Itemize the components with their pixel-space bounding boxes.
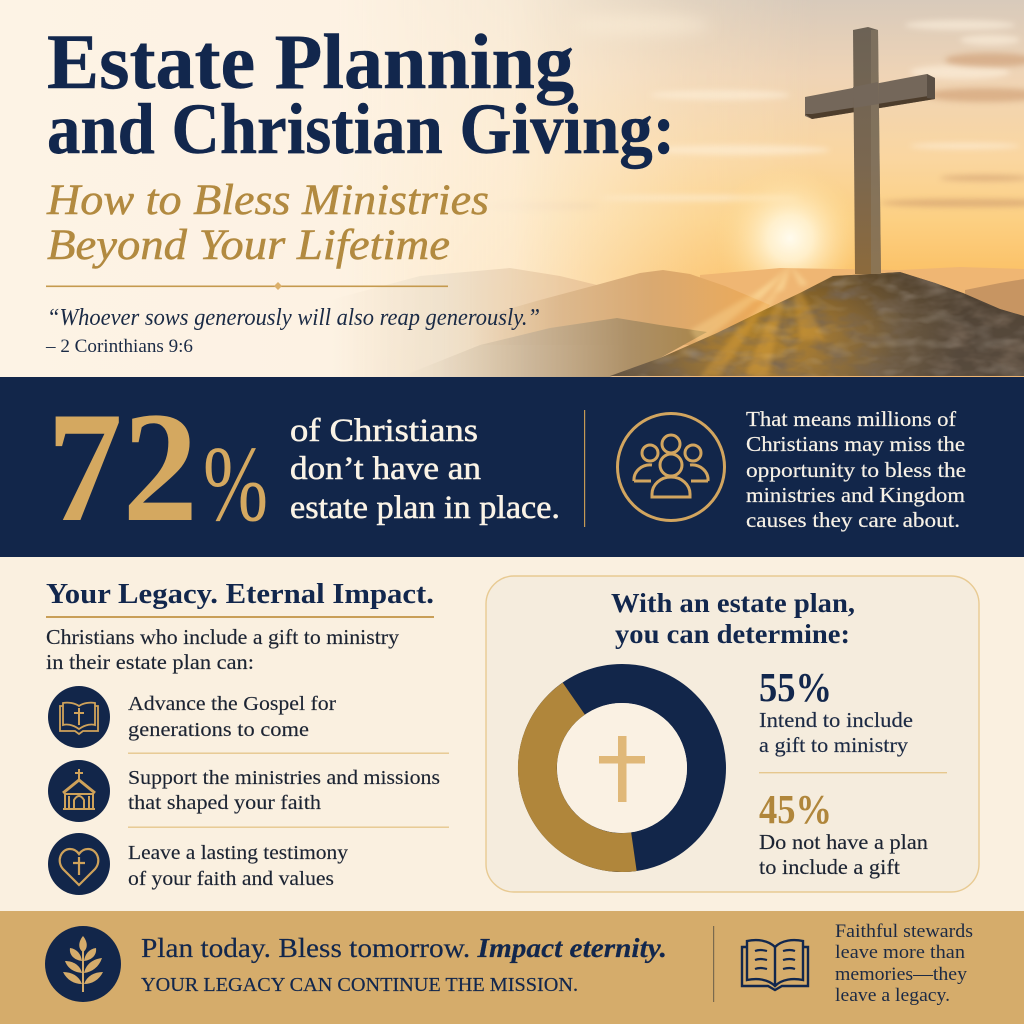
card heading [611, 588, 855, 649]
statistic 55%: 55% [759, 664, 832, 710]
hero photo: sunset sky, mountains, hill and cross [0, 0, 1024, 377]
legacy intro text: Christians who include a gift to ministry [46, 625, 400, 649]
title [47, 18, 675, 169]
explanatory text: causes they care about. [746, 508, 960, 532]
call to action [141, 933, 667, 996]
subtitle [46, 177, 489, 269]
statistic 55%: Intend to include [759, 708, 913, 732]
title: and Christian Giving: [47, 89, 675, 169]
explanatory text [746, 407, 966, 532]
legacy intro text [46, 625, 400, 674]
legacy heading: Your Legacy. Eternal Impact. [46, 578, 434, 610]
panel: estate plan card [486, 576, 979, 892]
closing note: leave a legacy. [835, 986, 950, 1006]
statistic 45% [759, 786, 929, 879]
subtitle: How to Bless Ministries [46, 177, 489, 224]
closing note: memories—they [835, 965, 968, 985]
cross [805, 27, 935, 274]
big statistic 72%: 72 [47, 380, 198, 555]
first benefit text: generations to come [128, 719, 309, 741]
third benefit text [128, 842, 349, 890]
sunbeams over the ridges [690, 272, 790, 350]
statistic description: of Christians [290, 413, 478, 449]
statistic description: don’t have an [290, 451, 481, 487]
second benefit text [128, 767, 440, 814]
legacy intro text: in their estate plan can: [46, 650, 254, 674]
closing note [835, 922, 973, 1006]
statistic 55%: a gift to ministry [759, 733, 909, 757]
second benefit text: Support the ministries and missions [128, 767, 440, 789]
card heading: you can determine: [615, 619, 850, 649]
subtitle: Beyond Your Lifetime [47, 222, 450, 269]
icon: heart with cross [48, 833, 110, 895]
big statistic 72%: % [203, 425, 268, 544]
statistic description [290, 413, 560, 526]
footer band [0, 911, 1024, 1024]
icon: wheat branch [45, 926, 121, 1002]
first benefit text: Advance the Gospel for [128, 693, 336, 715]
icon: open book [742, 940, 808, 990]
closing note: Faithful stewards [835, 922, 973, 942]
explanatory text: Christians may miss the [746, 432, 965, 456]
panel: your legacy [46, 578, 449, 895]
scripture quote: “Whoever sows generously will also reap generously.” [47, 305, 540, 331]
third benefit text: of your faith and values [128, 868, 334, 890]
statistic 55% [759, 664, 913, 757]
third benefit text: Leave a lasting testimony [128, 842, 349, 864]
scripture quote [45, 305, 540, 357]
explanatory text: That means millions of [746, 407, 957, 431]
explanatory text: ministries and Kingdom [746, 483, 965, 507]
ornament divider [46, 282, 448, 290]
title: Estate Planning [47, 18, 574, 105]
statistic description: estate plan in place. [290, 490, 560, 526]
call to action: YOUR LEGACY CAN CONTINUE THE MISSION. [141, 974, 578, 996]
card heading: With an estate plan, [611, 588, 855, 618]
scripture quote: – 2 Corinthians 9:6 [45, 336, 193, 357]
statistic 45%: to include a gift [759, 855, 900, 879]
statistic band [0, 377, 1024, 557]
icon: open bible [48, 686, 110, 748]
explanatory text: opportunity to bless the [746, 458, 966, 482]
first benefit text [128, 693, 336, 741]
distant ridges [700, 267, 1024, 377]
icon: church [48, 760, 110, 822]
second benefit text: that shaped your faith [128, 792, 321, 814]
statistic 45%: Do not have a plan [759, 830, 929, 854]
donut chart [537, 684, 706, 853]
icon: people in circle [618, 414, 724, 520]
closing note: leave more than [835, 943, 965, 963]
statistic 45%: 45% [759, 786, 832, 832]
call to action: Plan today. Bless tomorrow. Impact eternity. [141, 933, 667, 963]
